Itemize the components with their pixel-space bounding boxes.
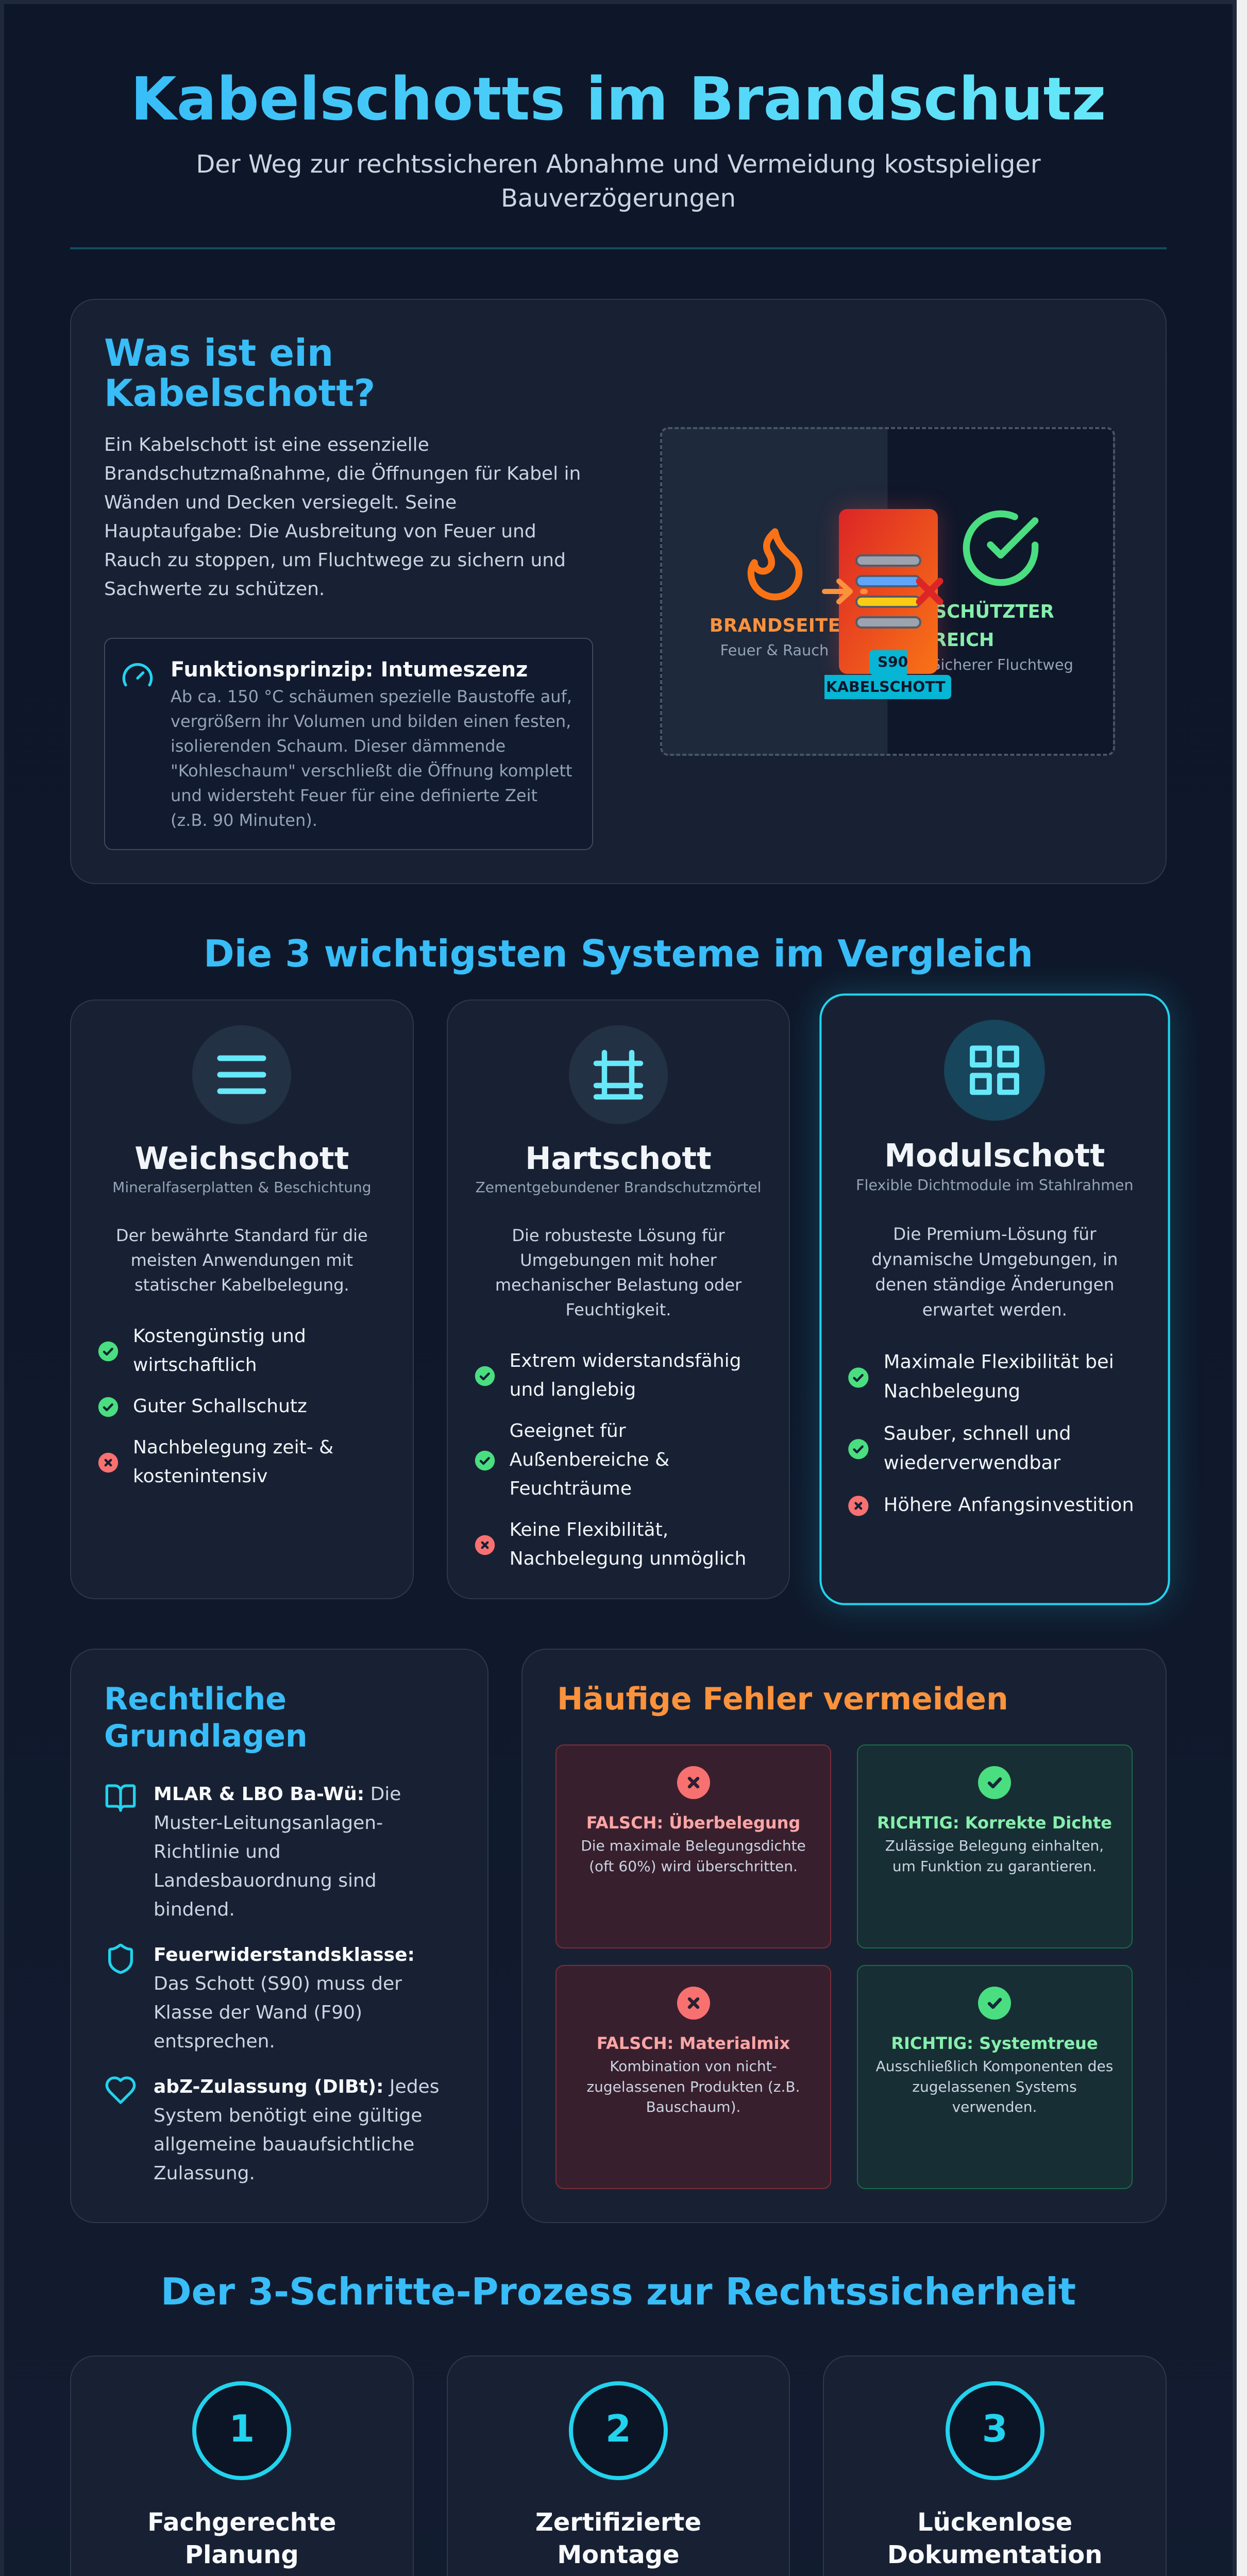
heading: Rechtliche Grundlagen: Rechtliche	[104, 1681, 287, 1717]
step heading: Montage	[557, 2540, 680, 2569]
icon: lines	[192, 1025, 291, 1124]
right: Systemtreue: zugelassenen Systems	[912, 2078, 1077, 2095]
item: Feuerwiderstandsklasse: Feuerwiderstandsklasse:	[154, 1944, 415, 1965]
wrong: Überbelegung: (oft 60%) wird überschritten.	[589, 1858, 798, 1875]
heading: Was ist ein Kabelschott: Kabelschott?	[104, 371, 375, 415]
item: abZ-Zulassung: allgemeine bauaufsichtliche	[154, 2134, 414, 2155]
label: Geschützter Bereich	[906, 601, 1073, 673]
panel: Weichschott	[70, 999, 414, 1599]
step heading	[71, 2506, 413, 2571]
label: Geschützter Bereich: BEREICH	[906, 630, 994, 651]
step heading	[448, 2506, 789, 2571]
text block: definition: Wänden und Decken versiegelt. Seine	[104, 492, 457, 513]
item: abZ-Zulassung: abZ-Zulassung (DIBt): Jedes	[154, 2076, 439, 2097]
tag: Kabelschott: KABELSCHOTT	[826, 679, 946, 696]
item: abZ-Zulassung	[104, 2073, 439, 2188]
right: Systemtreue: Ausschließlich Komponenten des	[876, 2058, 1113, 2075]
item: abZ-Zulassung: System benötigt eine gültige	[154, 2105, 422, 2126]
icon: hash	[569, 1025, 668, 1124]
callout text: "Kohleschaum" verschließt die Öffnung komplett	[171, 761, 572, 781]
wrong: Überbelegung: Die maximale Belegungsdichte	[581, 1837, 806, 1854]
panel: Häufige Fehler vermeiden	[521, 1649, 1167, 2223]
card description	[872, 1224, 1118, 1320]
text block: definition	[104, 434, 581, 600]
item: MLAR and LBO: MLAR & LBO Ba-Wü: Die	[154, 1784, 401, 1805]
item: MLAR and LBO	[105, 1784, 401, 1920]
callout text: vergrößern ihr Volumen und bilden einen festen,	[171, 711, 571, 731]
callout text: und widersteht Feuer für eine definierte Zeit	[171, 786, 537, 805]
step heading: Planung	[185, 2540, 299, 2569]
arrow: fire	[824, 581, 865, 602]
right: Systemtreue	[856, 1965, 1133, 2189]
pros and cons list: und langlebig	[510, 1379, 636, 1400]
heading: Häufige Fehler vermeiden: Häufige Fehler vermeiden	[557, 1681, 1008, 1717]
callout heading: Funktionsprinzip: Intumeszenz	[171, 658, 528, 682]
card heading: Hartschott	[525, 1141, 712, 1177]
callout text: (z.B. 90 Minuten).	[171, 810, 317, 830]
pros and cons list: Außenbereiche &	[510, 1449, 669, 1470]
right: Korrekte Dichte: RICHTIG: Korrekte Dichte	[877, 1813, 1112, 1833]
card heading: Modulschott	[885, 1138, 1105, 1174]
wrong: Materialmix	[555, 1965, 831, 2189]
callout: Funktionsprinzip Intumeszenz	[104, 638, 593, 850]
item: Feuerwiderstandsklasse: entsprechen.	[154, 2031, 275, 2052]
item: Feuerwiderstandsklasse: Das Schott (S90) muss der	[154, 1973, 402, 1994]
heading: Was ist ein Kabelschott: Was ist ein	[104, 331, 333, 375]
step number 1: 1	[229, 2407, 255, 2450]
callout text	[171, 687, 572, 830]
text block: definition: Brandschutzmaßnahme, die Öffnungen für Kabel in	[104, 463, 581, 484]
icon: flame	[751, 532, 799, 597]
wrong: Materialmix: Kombination von nicht-	[610, 2058, 777, 2075]
card description: erwartet werden.	[922, 1300, 1067, 1320]
pros and cons list: Kostengünstig und	[133, 1326, 306, 1347]
step number 3	[946, 2381, 1044, 2480]
text block: definition: Rauch zu stoppen, um Fluchtwege zu sichern und	[104, 550, 566, 571]
card description: mechanischer Belastung oder	[495, 1275, 742, 1295]
pros and cons list: Guter Schallschutz	[133, 1396, 307, 1417]
tag: S90	[869, 650, 908, 675]
right: Systemtreue: RICHTIG: Systemtreue	[891, 2033, 1098, 2053]
right: Systemtreue: verwenden.	[952, 2098, 1037, 2115]
wrong: Materialmix: Bauschaum).	[646, 2098, 740, 2115]
pros and cons list: Feuchträume	[510, 1478, 632, 1499]
pros and cons list: Nachbelegung unmöglich	[510, 1548, 746, 1569]
pros and cons list: Keine Flexibilität,	[510, 1519, 668, 1540]
step heading: Lückenlose	[917, 2508, 1072, 2537]
icon: blocked cross	[919, 581, 940, 602]
pros and cons list: Geeignet für	[510, 1420, 626, 1442]
item: MLAR and LBO: Muster-Leitungsanlagen-	[154, 1812, 383, 1834]
step number 2	[569, 2381, 668, 2480]
wrong: Materialmix: zugelassenen Produkten (z.B.	[586, 2078, 800, 2095]
pros and cons list: wiederverwendbar	[884, 1452, 1060, 1474]
text block: definition: Sachwerte zu schützen.	[104, 579, 325, 600]
icon: grid	[944, 1020, 1045, 1121]
item: Feuerwiderstandsklasse: Klasse der Wand (F90)	[154, 2002, 362, 2023]
label: Brandseite: BRANDSEITE	[710, 615, 840, 636]
card description: statischer Kabelbelegung.	[134, 1275, 349, 1295]
pros and cons list: wirtschaftlich	[133, 1354, 257, 1376]
cables	[856, 555, 920, 628]
card description: Umgebungen mit hoher	[520, 1250, 717, 1270]
item: abZ-Zulassung: Zulassung.	[154, 2163, 255, 2184]
card subtitle: Flexible Dichtmodule im Stahlrahmen	[856, 1176, 1134, 1194]
step heading: Zertifizierte	[535, 2508, 701, 2537]
card description: dynamische Umgebungen, in	[872, 1249, 1118, 1269]
card subtitle: Mineralfaserplatten & Beschichtung	[112, 1179, 371, 1196]
wrong: Materialmix: FALSCH: Materialmix	[597, 2033, 790, 2053]
step number 1	[192, 2381, 291, 2480]
wrong: Überbelegung	[555, 1744, 831, 1948]
card description: Feuchtigkeit.	[566, 1300, 671, 1319]
label: Brandseite	[710, 615, 840, 659]
panel: step 1	[70, 2355, 414, 2576]
pros and cons list	[848, 1351, 1134, 1516]
callout text: Ab ca. 150 °C schäumen spezielle Baustoffe auf,	[171, 687, 572, 706]
card heading: Weichschott	[134, 1141, 349, 1177]
right: Korrekte Dichte: Zulässige Belegung einhalten,	[885, 1837, 1104, 1854]
item: MLAR and LBO: Richtlinie und	[154, 1841, 281, 1862]
panel: Rechtliche Grundlagen	[70, 1649, 488, 2223]
panel: step 3	[823, 2355, 1167, 2576]
card description: Die robusteste Lösung für	[512, 1226, 725, 1245]
panel: step 2	[447, 2355, 790, 2576]
subtitle: Der Weg zur rechtssicheren Abnahme und Vermeidung kostspieliger	[196, 150, 1041, 179]
label: Geschützter Bereich: GESCHÜTZTER	[906, 601, 1054, 622]
icon: gauge	[123, 663, 153, 686]
heading: 3-Schritte-Prozess: Der 3-Schritte-Prozess zur Rechtssicherheit	[161, 2270, 1076, 2313]
right: Korrekte Dichte: um Funktion zu garantieren.	[892, 1858, 1097, 1875]
tag: S90: S90	[878, 653, 908, 670]
item: Feuerwiderstandsklasse	[104, 1941, 415, 2056]
text block: definition: Ein Kabelschott ist eine essenzielle	[104, 434, 429, 455]
pros and cons list: Nachbelegung zeit- &	[133, 1437, 333, 1458]
step heading: Fachgerechte	[147, 2508, 336, 2537]
card description: denen ständige Änderungen	[875, 1275, 1115, 1295]
card description: Die Premium-Lösung für	[893, 1224, 1097, 1244]
item: MLAR and LBO: bindend.	[154, 1899, 235, 1920]
label: Brandseite: Feuer & Rauch	[720, 641, 829, 659]
card subtitle: Zementgebundener Brandschutzmörtel	[476, 1179, 761, 1196]
panel: Hartschott	[447, 999, 790, 1599]
pros and cons list	[98, 1326, 333, 1487]
barrier block	[839, 509, 938, 674]
heading: Rechtliche Grundlagen	[104, 1681, 308, 1754]
tag: Kabelschott	[824, 675, 951, 699]
pros and cons list: Höhere Anfangsinvestition	[884, 1494, 1134, 1516]
heading: Rechtliche Grundlagen: Grundlagen	[104, 1718, 308, 1754]
wrong: Überbelegung: FALSCH: Überbelegung	[586, 1813, 800, 1833]
card description: meisten Anwendungen mit	[131, 1250, 353, 1270]
item: MLAR and LBO: Landesbauordnung sind	[154, 1870, 377, 1891]
pros and cons list	[475, 1350, 746, 1569]
card description	[116, 1226, 368, 1295]
right: Korrekte Dichte	[856, 1744, 1133, 1948]
step number 3: 3	[982, 2407, 1008, 2450]
step heading: Dokumentation	[887, 2540, 1102, 2569]
card description	[495, 1226, 742, 1319]
subtitle	[196, 150, 1041, 213]
pros and cons list: Extrem widerstandsfähig	[510, 1350, 741, 1371]
pros and cons list: Sauber, schnell und	[884, 1423, 1071, 1445]
title: Kabelschotts im Brandschutz	[130, 65, 1106, 134]
callout text: isolierenden Schaum. Dieser dämmende	[171, 736, 505, 756]
pros and cons list: Maximale Flexibilität bei	[884, 1351, 1114, 1373]
subtitle: Bauverzögerungen	[501, 184, 736, 213]
label: Geschützter Bereich: Sicherer Fluchtweg	[931, 656, 1073, 673]
heading: Systeme im Vergleich: Die 3 wichtigsten Systeme im Vergleich	[204, 932, 1033, 975]
text block: definition: Hauptaufgabe: Die Ausbreitung von Feuer und	[104, 521, 536, 542]
panel: Was ist ein Kabelschott	[70, 299, 1167, 884]
diagram: fire barrier	[660, 427, 1115, 756]
panel: Modulschott	[820, 993, 1170, 1605]
pros and cons list: kostenintensiv	[133, 1466, 267, 1487]
step number 2: 2	[605, 2407, 631, 2450]
icon: check circle	[966, 514, 1035, 583]
pros and cons list: Nachbelegung	[884, 1381, 1020, 1402]
card description: Der bewährte Standard für die	[116, 1226, 368, 1245]
step heading	[824, 2506, 1166, 2571]
heading: Was ist ein Kabelschott	[104, 331, 375, 415]
